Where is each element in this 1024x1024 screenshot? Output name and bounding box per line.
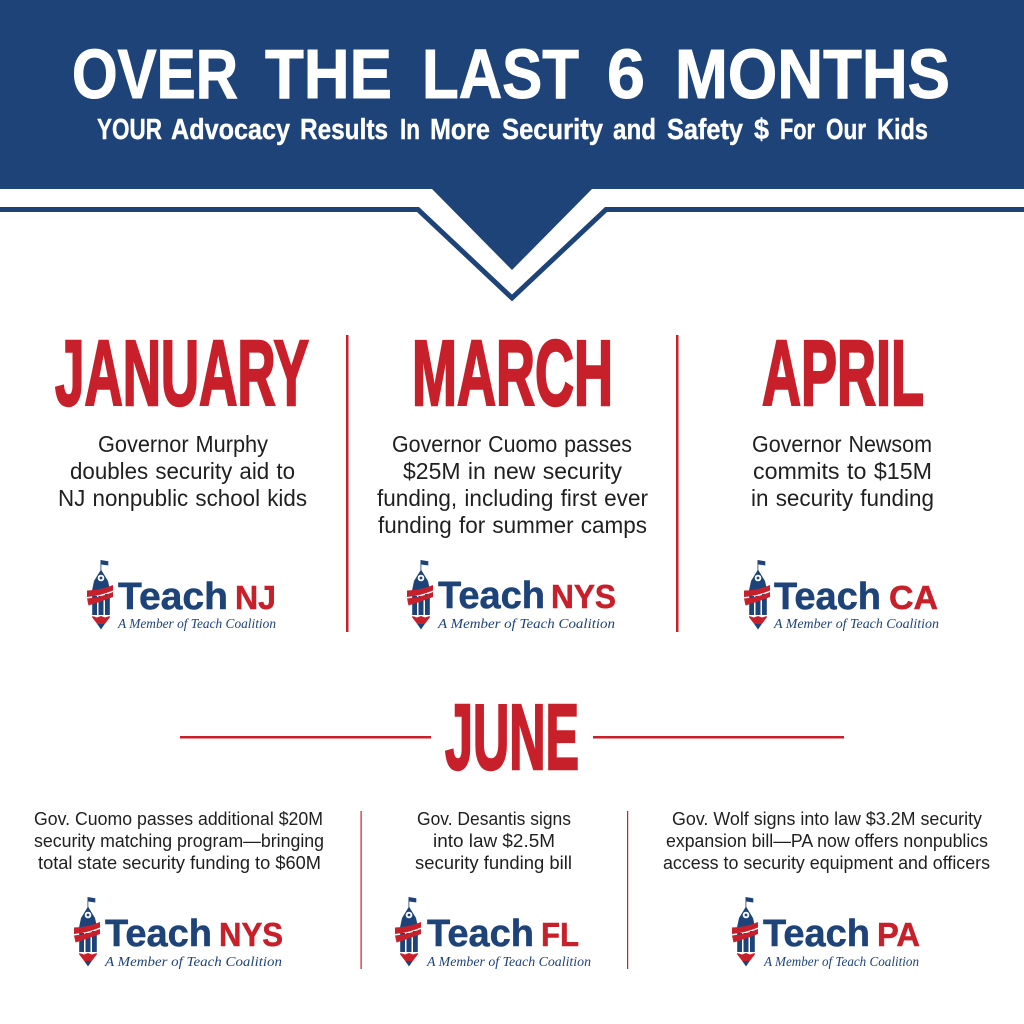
month heading: June: JUNE <box>445 685 579 789</box>
logo: Teach NYS: NYS <box>551 578 616 615</box>
header title: MONTHS <box>675 35 950 113</box>
logo: Teach NYS: A Member of Teach Coalition <box>437 616 615 631</box>
divider <box>676 335 678 632</box>
header subtitle: For <box>780 114 815 146</box>
logo: Teach FL: FL <box>541 916 579 953</box>
header subtitle: YOUR <box>97 114 162 146</box>
text: Florida description: into law $2.5M <box>433 830 555 851</box>
column: June Florida <box>395 808 591 969</box>
header title: 6 <box>607 35 645 113</box>
header subtitle <box>97 114 928 146</box>
header subtitle: In <box>400 114 420 146</box>
logo: Teach NYS <box>74 897 283 969</box>
column: June Pennsylvania <box>663 808 990 969</box>
logo: Teach NYS: Teach <box>438 575 545 617</box>
text: January description: doubles security aid to <box>70 458 295 484</box>
text: January description <box>58 431 307 511</box>
text: New York description: Gov. Cuomo passes additional $20M <box>34 808 323 829</box>
logo: Teach CA: A Member of Teach Coalition <box>773 616 939 631</box>
text: March description: funding for summer camps <box>378 512 647 538</box>
logo: Teach FL <box>395 897 591 969</box>
header subtitle: Advocacy <box>171 114 290 146</box>
column: June New York <box>34 808 324 969</box>
header title <box>72 35 950 113</box>
divider <box>360 811 362 969</box>
divider <box>346 335 348 632</box>
logo: Teach NJ: NJ <box>235 579 276 616</box>
logo: Teach NJ: A Member of Teach Coalition <box>117 616 276 631</box>
header title: LAST <box>422 35 579 113</box>
logo: Teach PA <box>732 897 920 969</box>
logo: Teach FL: Teach <box>427 913 534 955</box>
text: Florida description <box>415 808 572 873</box>
header subtitle: Our <box>826 114 866 146</box>
header title: THE <box>265 35 392 113</box>
logo: Teach NYS: Teach <box>105 913 212 955</box>
logo: Teach NYS: A Member of Teach Coalition <box>104 954 282 969</box>
text: New York description: security matching program—bringing <box>34 830 324 851</box>
header title: OVER <box>72 35 238 113</box>
header subtitle: Security <box>502 114 603 146</box>
divider <box>627 811 628 969</box>
text: March description: $25M in new security <box>403 458 622 484</box>
month heading: March: MARCH <box>412 321 613 425</box>
column: April <box>744 321 939 631</box>
logo: Teach NJ <box>87 560 276 631</box>
header subtitle: More <box>430 114 490 146</box>
text: March description: funding, including first ever <box>377 485 648 511</box>
header subtitle: $ <box>754 114 769 146</box>
text: April description: in security funding <box>751 485 934 511</box>
logo: Teach CA <box>744 560 939 631</box>
logo: Teach NYS <box>407 560 616 631</box>
logo: Teach PA: A Member of Teach Coalition <box>763 954 919 969</box>
text: New York description <box>34 808 324 873</box>
logo: Teach PA: Teach <box>763 913 870 955</box>
text: New York description: total state security funding to $60M <box>38 852 321 873</box>
text: April description: commits to $15M <box>753 458 932 484</box>
text: April description: Governor Newsom <box>752 431 932 457</box>
text: Pennsylvania description: access to security equipment and officers <box>663 852 990 873</box>
column: March <box>377 321 648 631</box>
text: Pennsylvania description: expansion bill—PA now offers nonpublics <box>666 830 988 851</box>
text: Florida description: Gov. Desantis signs <box>417 808 571 829</box>
text: Pennsylvania description: Gov. Wolf signs into law $3.2M security <box>672 808 983 829</box>
text: March description <box>377 431 648 538</box>
text: April description <box>751 431 934 511</box>
column: January <box>55 321 309 631</box>
text: March description: Governor Cuomo passes <box>392 431 632 457</box>
header banner <box>0 0 1024 270</box>
text: Pennsylvania description <box>663 808 990 873</box>
logo: Teach CA: CA <box>889 579 938 616</box>
logo: Teach FL: A Member of Teach Coalition <box>426 954 591 969</box>
header subtitle: Kids <box>877 114 928 146</box>
header subtitle: Safety <box>667 114 743 146</box>
month heading: January: JANUARY <box>55 321 309 425</box>
logo: Teach CA: Teach <box>774 576 881 618</box>
header subtitle: and <box>613 114 656 146</box>
logo: Teach NJ: Teach <box>118 576 228 618</box>
chevron line below banner <box>0 210 1024 298</box>
logo: Teach PA: PA <box>877 916 920 953</box>
text: Florida description: security funding bill <box>415 852 572 873</box>
text: January description: NJ nonpublic school kids <box>58 485 307 511</box>
logo: Teach NYS: NYS <box>219 916 283 953</box>
header subtitle: Results <box>300 114 388 146</box>
text: January description: Governor Murphy <box>98 431 268 457</box>
